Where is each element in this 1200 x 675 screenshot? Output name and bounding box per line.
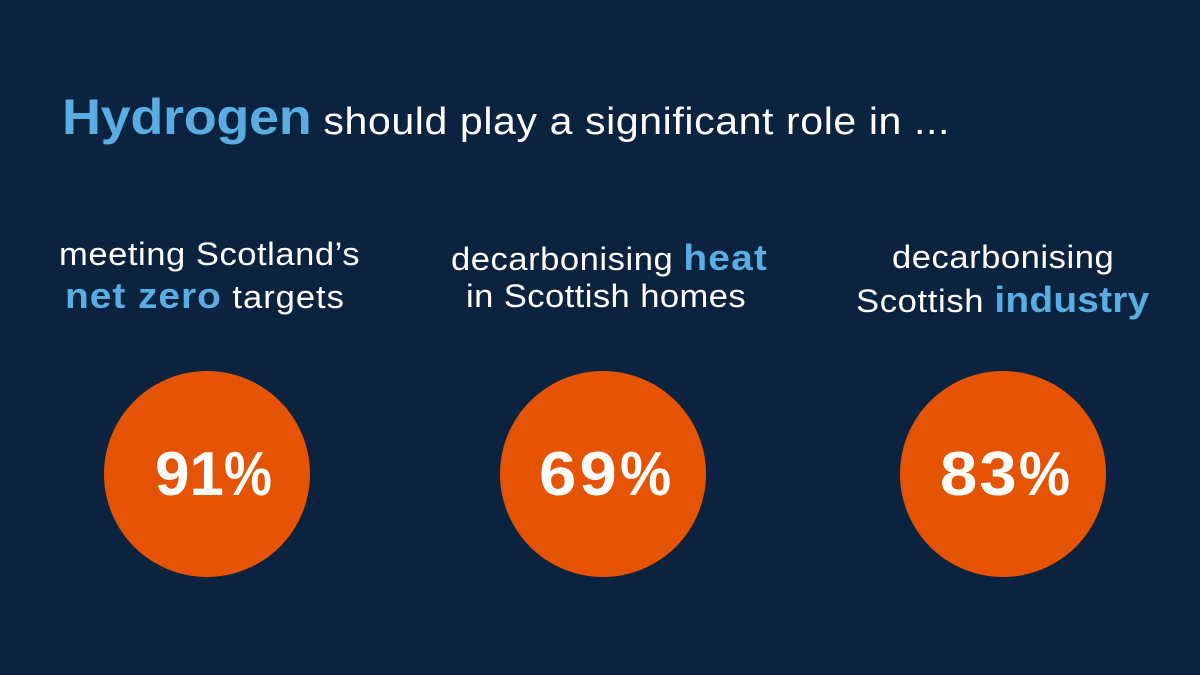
stat circle: 83%: 83	[940, 440, 1019, 509]
label: net zero targets: net zero targets	[65, 275, 345, 316]
stat circle: 83%	[900, 371, 1106, 577]
stat circle: 91%: 91	[155, 440, 224, 509]
stat circle: 69%	[500, 371, 706, 577]
stat circle: 91%: %	[224, 440, 272, 509]
label: heat in homes: decarbonising heat	[451, 237, 768, 278]
label: industry: decarbonising	[892, 239, 1114, 275]
label: industry: Scottish industry	[856, 279, 1149, 320]
stat circle: 69%: 69	[539, 440, 620, 509]
label: heat in homes: in Scottish homes	[466, 278, 746, 314]
label: net zero targets: meeting Scotland’s	[59, 236, 360, 272]
stat circle: 83%: %	[1019, 440, 1070, 509]
label: heat in homes	[451, 237, 768, 314]
title: Hydrogen should play a significant role in ...	[62, 89, 950, 145]
label: net zero targets	[59, 236, 360, 316]
stat circle: 69%: %	[620, 440, 671, 509]
label: industry	[856, 239, 1149, 320]
stat circle: 91%	[104, 371, 310, 577]
